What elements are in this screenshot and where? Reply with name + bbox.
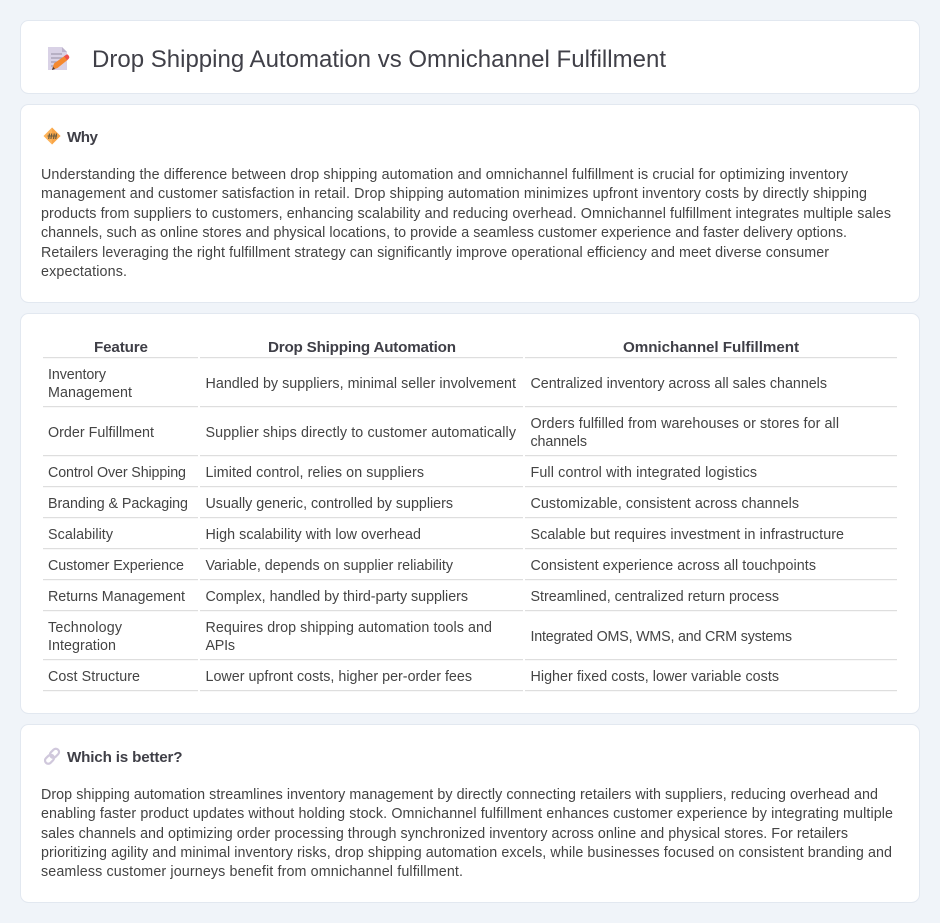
text block: which is better paragraph: prioritizing agility and minimal inventory risks, drop shipping automation excels, while businesses focused on consistent branding and <box>41 845 892 861</box>
row: control over shipping: Control Over Shipping <box>48 465 186 481</box>
icon: chain link <box>44 747 60 765</box>
table header: Drop Shipping Automation <box>268 339 456 356</box>
table header: Feature <box>94 339 148 356</box>
text block: why paragraph: expectations. <box>41 264 127 280</box>
row: order fulfillment: Orders fulfilled from warehouses or stores for all <box>530 416 839 432</box>
table header <box>94 339 799 356</box>
text block: why paragraph <box>41 167 891 280</box>
row: branding and packaging: Branding & Packaging <box>48 496 188 512</box>
row: inventory management <box>48 367 827 401</box>
row: returns management: Returns Management <box>48 589 185 605</box>
row: order fulfillment: Order Fulfillment <box>48 425 154 441</box>
row: inventory management: Management <box>48 385 132 401</box>
text block: which is better paragraph: sales channels and optimizing order processing through synchronized inventory across online and physical stores. For retailers <box>41 826 848 842</box>
row: scalability <box>48 527 844 543</box>
text block: why paragraph: products from suppliers to customers, enhancing scalability and reducing overhead. Omnichannel fulfillment integrates multiple sales <box>41 206 891 222</box>
row: customer experience: Consistent experience across all touchpoints <box>530 558 816 574</box>
text block: why paragraph: channels, such as online stores and physical locations, to provide a seamless customer experience and faster delivery options. <box>41 225 847 241</box>
row: scalability: Scalability <box>48 527 114 543</box>
row: returns management <box>48 589 779 605</box>
row: branding and packaging <box>48 496 799 512</box>
text block: which is better paragraph: seamless customer journeys benefit from omnichannel fulfillment. <box>41 864 463 880</box>
row: inventory management: Inventory <box>48 367 107 383</box>
row: control over shipping <box>48 465 757 481</box>
heading: why: Why <box>67 129 99 146</box>
row: technology integration: APIs <box>206 638 235 654</box>
row: cost structure: Higher fixed costs, lower variable costs <box>530 669 779 685</box>
panel: title card <box>20 20 920 94</box>
row: customer experience: Variable, depends on supplier reliability <box>206 558 454 574</box>
row: cost structure: Lower upfront costs, higher per-order fees <box>206 669 472 685</box>
row: customer experience: Customer Experience <box>48 558 184 574</box>
text block: which is better paragraph: Drop shipping automation streamlines inventory management by directly connecting retailers with suppliers, reducing overhead and <box>41 787 878 803</box>
row: order fulfillment: channels <box>530 434 587 450</box>
row: control over shipping: Limited control, relies on suppliers <box>206 465 424 481</box>
table header: Omnichannel Fulfillment <box>623 339 799 356</box>
row: technology integration: Integration <box>48 638 116 654</box>
text block: why paragraph: Retailers leveraging the right fulfillment strategy can significantly improve operational efficiency and meet diverse consumer <box>41 245 829 261</box>
text block: which is better paragraph <box>41 787 893 880</box>
row: order fulfillment: Supplier ships directly to customer automatically <box>206 425 517 441</box>
title: Drop Shipping Automation vs Omnichannel Fulfillment <box>92 46 666 73</box>
panel: which is better <box>20 724 920 902</box>
row: technology integration: Technology <box>48 620 123 636</box>
row: control over shipping: Full control with integrated logistics <box>530 465 757 481</box>
icon: memo with pencil <box>48 47 69 70</box>
row: scalability: High scalability with low overhead <box>206 527 421 543</box>
row: technology integration <box>48 620 792 654</box>
icon: diamond sign <box>44 128 60 144</box>
row: cost structure: Cost Structure <box>48 669 140 685</box>
heading: which is better: Which is better? <box>67 749 182 766</box>
row: branding and packaging: Customizable, consistent across channels <box>530 496 799 512</box>
row: order fulfillment <box>48 416 839 450</box>
text block: why paragraph: management and customer satisfaction in retail. Drop shipping automation minimizes upfront inventory costs by directly shipping <box>41 186 867 202</box>
row: technology integration: Requires drop shipping automation tools and <box>206 620 492 636</box>
panel: comparison table <box>20 314 920 714</box>
text block: why paragraph: Understanding the difference between drop shipping automation and omnichannel fulfillment is crucial for optimizing inventory <box>41 167 849 183</box>
row: inventory management: Handled by suppliers, minimal seller involvement <box>206 376 516 392</box>
row: returns management: Complex, handled by third-party suppliers <box>206 589 468 605</box>
row: technology integration: Integrated OMS, WMS, and CRM systems <box>530 629 792 645</box>
panel: why <box>20 104 920 302</box>
row: cost structure <box>48 669 779 685</box>
row: scalability: Scalable but requires investment in infrastructure <box>530 527 844 543</box>
row: branding and packaging: Usually generic, controlled by suppliers <box>206 496 453 512</box>
row: customer experience <box>48 558 816 574</box>
text block: which is better paragraph: enabling faster product updates without holding stock. Omnichannel fulfillment enhances customer experience by integrating multiple <box>41 806 893 822</box>
row: inventory management: Centralized inventory across all sales channels <box>530 376 827 392</box>
row: returns management: Streamlined, centralized return process <box>530 589 779 605</box>
